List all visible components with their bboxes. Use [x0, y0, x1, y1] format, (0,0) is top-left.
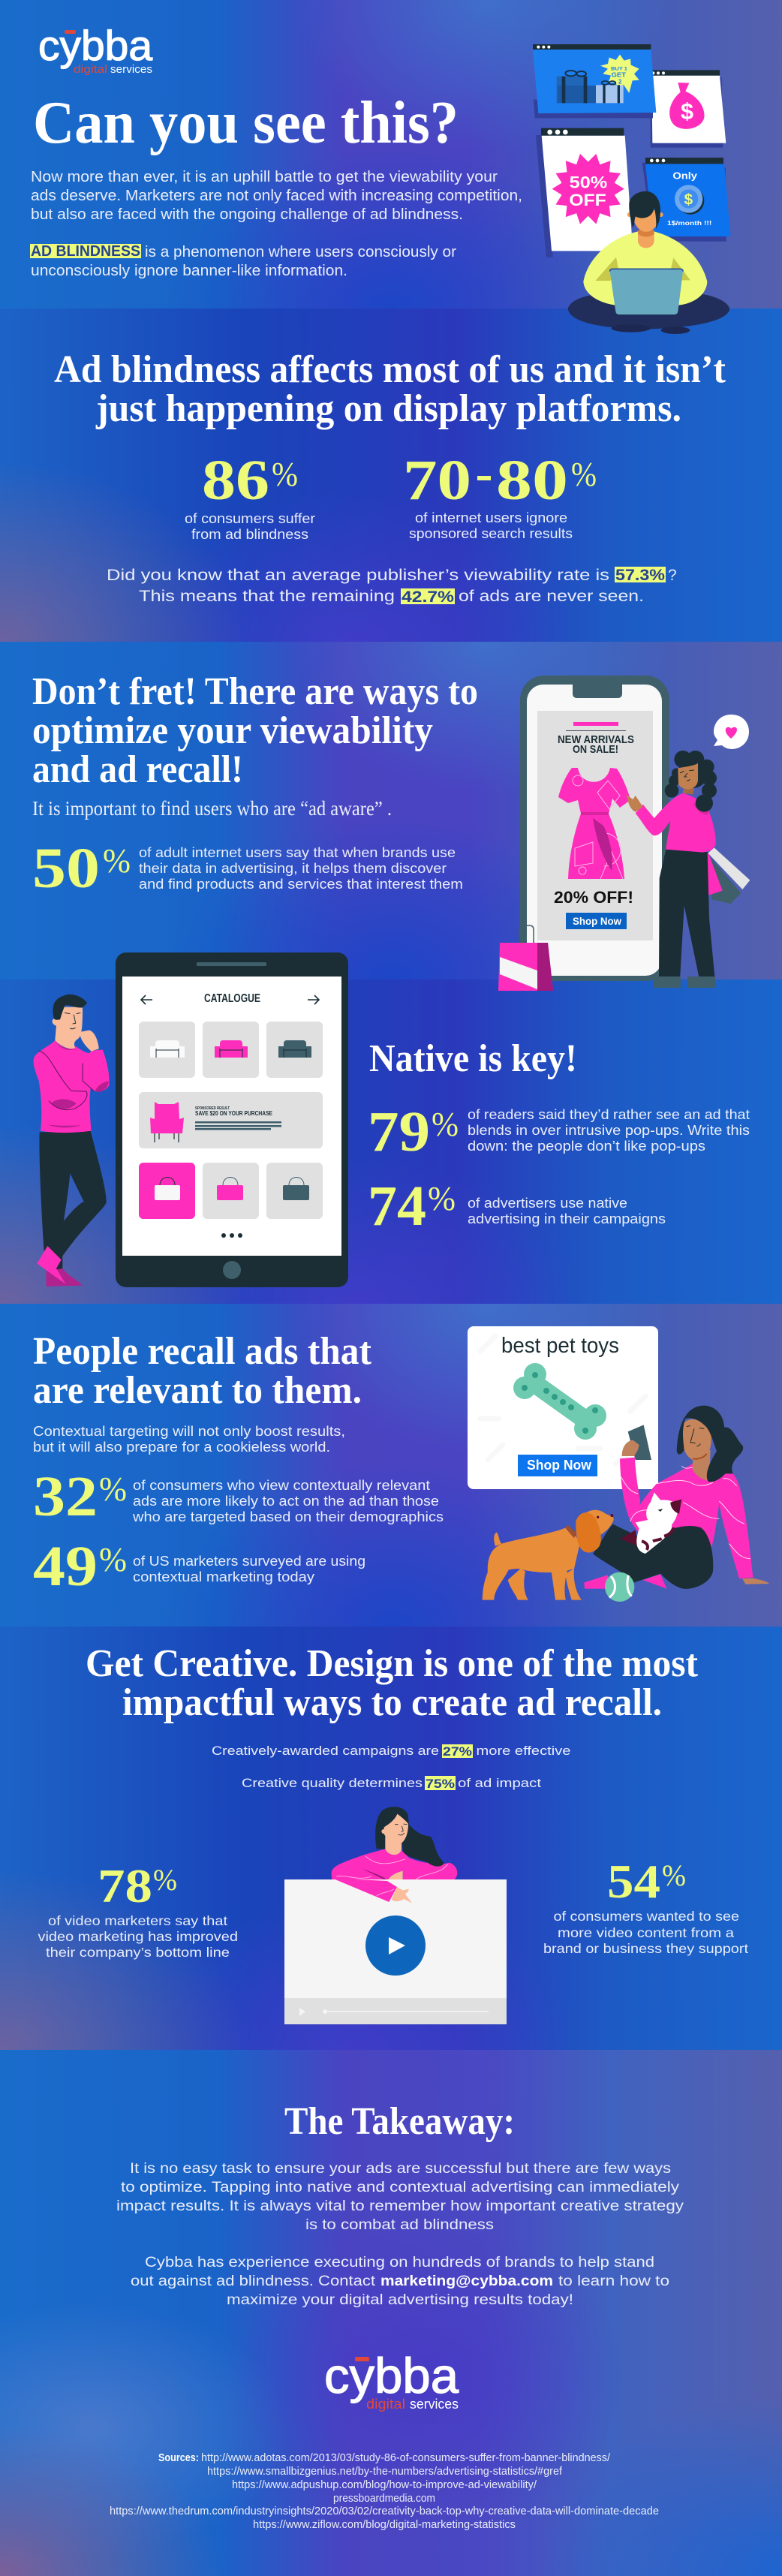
stat: 50% — [32, 837, 463, 900]
woman behind player — [332, 1807, 457, 1882]
ad blindness definition: unconsciously ignore banner-like information. — [31, 263, 347, 279]
catalogue heading and arrows: CATALOGUE — [204, 992, 260, 1005]
window: 50% off: 50% — [570, 173, 607, 191]
heading: Don’t fret! There are ways to — [32, 670, 478, 713]
stat: 50%: 50 — [32, 837, 100, 900]
heading: People recall ads that — [33, 1330, 372, 1373]
subheading: It is important to find users who are “ad aware” . — [32, 797, 392, 820]
panel: get creative — [38, 1642, 748, 2024]
stat: 78%: % — [153, 1863, 177, 1897]
sponsored result banner — [139, 1092, 323, 1148]
background: optimize panel — [0, 642, 782, 980]
stat: 70-80%: sponsored search results — [409, 526, 573, 541]
sources: https://www.ziflow.com/blog/digital-marketing-statistics — [253, 2518, 516, 2531]
stat: 78%: their company’s bottom line — [46, 1945, 230, 1960]
logo: cybba digital services: digital — [74, 63, 107, 76]
intro paragraph: but also are faced with the ongoing challenge of ad blindness. — [31, 206, 463, 223]
stat: 78%: 78 — [98, 1859, 152, 1912]
stat: 74%: advertising in their campaigns — [468, 1211, 666, 1226]
heading: The Takeaway: — [284, 2100, 515, 2143]
stat: 32%: who are targeted based on their demographics — [132, 1509, 444, 1524]
window: 1$/month: $ — [684, 191, 693, 209]
stat: 79%: down: the people don’t like pop-ups — [468, 1139, 705, 1154]
background: hero panel — [0, 0, 782, 308]
person with laptop — [568, 191, 729, 334]
stat: 74%: % — [428, 1179, 456, 1217]
window: 1$/month: 1$/month !!! — [667, 219, 711, 227]
sources: Sources: — [158, 2451, 199, 2464]
contextual targeting text: Contextual targeting will not only boost results, — [33, 1424, 345, 1439]
illustration: woman with shopping bags — [626, 751, 750, 988]
illustration: phone with dress ad — [520, 676, 669, 981]
heading: Ad blindness affects most of us and it isn’t — [54, 348, 726, 391]
stat: 49%: % — [99, 1540, 127, 1578]
woman — [584, 1406, 769, 1589]
window: 1$/month: Only — [672, 170, 697, 181]
contact paragraph: Cybba has experience executing on hundreds of brands to help stand — [145, 2255, 654, 2271]
window: buy 1 get 2: BUY 1 — [611, 66, 627, 71]
contact paragraph: out against ad blindness. Contact — [131, 2274, 376, 2289]
stat: 32%: of consumers who view contextually relevant — [133, 1478, 430, 1493]
stat: 32%: ads are more likely to act on the ad than those — [133, 1494, 439, 1509]
logo: cybba digital services: services — [410, 2397, 459, 2412]
stat: 49% — [33, 1535, 365, 1598]
woman's arm over player — [332, 1879, 412, 1903]
shop now button — [566, 913, 627, 929]
stat: 70-80%: % — [571, 455, 597, 493]
heading: and ad recall! — [32, 748, 243, 791]
viewability callout — [107, 567, 677, 606]
stat: 49%: contextual marketing today — [133, 1569, 314, 1584]
panel: native is key — [34, 952, 750, 1287]
panel: relevant ads — [33, 1326, 769, 1602]
panel: takeaway — [110, 2100, 684, 2531]
stat: 79%: % — [432, 1105, 459, 1143]
window: 50% off: OFF — [569, 191, 606, 209]
heading: impactful ways to create ad recall. — [122, 1681, 662, 1724]
catalogue heading and arrows — [141, 992, 319, 1005]
stat: 78% — [38, 1859, 238, 1960]
viewability callout: 57.3% — [615, 567, 665, 584]
creative stat: 27%: more effective — [476, 1744, 570, 1758]
sources — [110, 2451, 659, 2531]
stat: 70-80% — [403, 449, 597, 541]
background: native panel — [0, 980, 782, 1304]
icon: heart speech bubble — [714, 715, 749, 749]
illustration: thinking man — [34, 995, 110, 1286]
illustration: woman with dog and cat — [483, 1406, 769, 1602]
product tiles — [139, 1022, 323, 1078]
illustration: tablet catalogue — [116, 952, 348, 1287]
stat: 79%: 79 — [368, 1100, 430, 1163]
pagination dots — [221, 1233, 242, 1238]
sources: https://www.thedrum.com/industryinsights/2020/03/02/creativity-back-top-why-creative-data-will-dominate-decade — [110, 2505, 659, 2517]
takeaway paragraph: to optimize. Tapping into native and contextual advertising can immediately — [121, 2180, 680, 2195]
takeaway paragraph — [116, 2161, 684, 2233]
stat: 79%: of readers said they’d rather see an ad that — [468, 1107, 750, 1122]
takeaway paragraph: impact results. It is always vital to remember how important creative strategy — [116, 2198, 684, 2214]
icon: tennis ball — [605, 1572, 634, 1602]
contact paragraph: to learn how to — [558, 2274, 669, 2289]
icon: play button — [365, 1915, 426, 1976]
panel: optimize viewability — [32, 670, 750, 991]
stat: 74% — [368, 1175, 666, 1238]
contextual targeting text: but it will also prepare for a cookieless world. — [33, 1440, 330, 1455]
stat: 70-80%: of internet users ignore — [415, 510, 567, 525]
window: money bag — [651, 70, 726, 148]
stat: 50%: % — [103, 841, 131, 880]
cat — [621, 1492, 681, 1554]
panel: ad blindness stats — [54, 348, 726, 606]
heading — [54, 348, 726, 430]
stat: 54%: more video content from a — [558, 1925, 734, 1940]
viewability callout: This means that the remaining — [139, 588, 395, 605]
stat: 79%: blends in over intrusive pop-ups. Write this — [468, 1123, 750, 1138]
stat: 54% — [543, 1855, 748, 1956]
background: relevance panel — [0, 1304, 782, 1627]
illustration: woman leaning on video player — [284, 1807, 507, 2024]
ad blindness definition — [30, 243, 456, 279]
contact paragraph: marketing@cybba.com — [380, 2274, 553, 2289]
logo: cybba digital services: cybba — [324, 2348, 459, 2403]
creative stat: 75%: of ad impact — [458, 1776, 541, 1790]
ad headline — [558, 733, 634, 756]
contextual targeting text — [33, 1424, 345, 1455]
creative stat: 75%: Creative quality determines — [242, 1776, 423, 1790]
creative stat: 75% — [242, 1776, 541, 1791]
background: ad blindness stats panel — [0, 308, 782, 642]
heading: Native is key! — [369, 1037, 577, 1080]
icon: bone — [513, 1363, 606, 1440]
stat: 78%: video marketing has improved — [38, 1929, 238, 1944]
window: buy 1 get 2: 2 — [618, 79, 622, 86]
takeaway paragraph: It is no easy task to ensure your ads are successful but there are few ways — [130, 2161, 671, 2177]
window: money bag: $ — [681, 98, 693, 124]
stat: 86%: 86 — [202, 449, 269, 512]
heading: are relevant to them. — [33, 1369, 362, 1412]
stat: 50%: of adult internet users say that when brands use — [139, 845, 456, 860]
stat: 54%: 54 — [607, 1855, 660, 1908]
heading: Get Creative. Design is one of the most — [86, 1642, 699, 1685]
sources: https://www.smallbizgenius.net/by-the-numbers/advertising-statistics/#gref — [207, 2465, 563, 2478]
intro paragraph: ads deserve. Marketers are not only faced with increasing competition, — [31, 188, 522, 204]
stat: 86%: % — [272, 455, 298, 493]
stat: 32%: % — [99, 1470, 127, 1508]
heading: just happening on display platforms. — [95, 387, 681, 430]
stat: 49%: 49 — [33, 1535, 98, 1598]
window: 1$/month — [642, 158, 730, 242]
stat: 54%: % — [662, 1858, 686, 1892]
ad headline: ON SALE! — [573, 743, 618, 756]
stat: 74%: of advertisers use native — [468, 1196, 627, 1211]
stat: 86%: of consumers suffer — [185, 511, 315, 526]
stat: 70-80%: 80 — [496, 449, 568, 512]
ad blindness definition: AD BLINDNESS — [31, 243, 140, 260]
stat: 79% — [368, 1100, 750, 1163]
creative stat: 27%: Creatively-awarded campaigns are — [212, 1744, 439, 1758]
creative stat: 27% — [212, 1744, 570, 1759]
sponsored result banner: SPONSORED RESULT — [195, 1106, 230, 1111]
stat: 86% — [185, 449, 315, 542]
shop now button — [518, 1455, 597, 1476]
logo: cybba digital services: services — [110, 63, 152, 76]
heading — [33, 1330, 372, 1412]
heading — [32, 670, 478, 791]
stat: 70-80%: 70 — [403, 449, 471, 512]
creative stat: 27%: 27% — [443, 1744, 472, 1759]
ad card: best pet toys — [468, 1326, 658, 1489]
stat: 86%: from ad blindness — [191, 527, 308, 542]
takeaway paragraph: is to combat ad blindness — [305, 2217, 494, 2233]
intro paragraph: Now more than ever, it is an uphill battle to get the viewability your — [31, 169, 498, 185]
dog — [483, 1510, 614, 1600]
title: Can you see this? — [33, 90, 459, 156]
ad headline: best pet toys — [501, 1334, 619, 1358]
stat: 50%: their data in advertising, it helps them discover — [139, 861, 447, 876]
window: buy 1 get 2: GET — [612, 71, 627, 79]
sources: https://www.adpushup.com/blog/how-to-improve-ad-viewability/ — [232, 2478, 537, 2491]
background: takeaway panel — [0, 2050, 782, 2576]
creative stat: 75%: 75% — [426, 1777, 455, 1791]
stat: 32%: 32 — [33, 1465, 98, 1528]
stat: 54%: of consumers wanted to see — [554, 1909, 739, 1924]
viewability callout: Did you know that an average publisher’s viewability rate is — [107, 567, 609, 584]
shop now button: Shop Now — [573, 915, 621, 927]
logo: cybba digital services: digital — [366, 2397, 405, 2412]
heading — [86, 1642, 699, 1724]
sponsored result banner: SAVE $20 ON YOUR PURCHASE — [195, 1110, 273, 1117]
contact paragraph — [131, 2255, 669, 2308]
stat: 54%: brand or business they support — [543, 1941, 748, 1956]
shop now button: Shop Now — [527, 1458, 592, 1473]
ad headline: NEW ARRIVALS — [558, 733, 634, 746]
stat: 78%: of video marketers say that — [48, 1913, 227, 1928]
sources: pressboardmedia.com — [333, 2492, 435, 2505]
sources: http://www.adotas.com/2013/03/study-86-of-consumers-suffer-from-banner-blindness/ — [201, 2451, 611, 2464]
stat: 50%: and find products and services that interest them — [139, 877, 463, 892]
viewability callout: of ads are never seen. — [459, 588, 644, 605]
heading: optimize your viewability — [32, 709, 433, 752]
bag tiles — [139, 1163, 323, 1219]
contact paragraph: maximize your digital advertising results today! — [227, 2292, 573, 2308]
video player — [284, 1879, 507, 2024]
illustration: ad windows and person with laptop — [533, 44, 730, 334]
logo: cybba digital services: cybba — [38, 22, 153, 69]
panel: hero — [30, 22, 730, 334]
dress — [558, 768, 630, 879]
ad blindness definition: is a phenomenon where users consciously or — [145, 244, 456, 260]
icon: pink shopping bag — [498, 925, 553, 991]
stat: 74%: 74 — [368, 1175, 426, 1238]
viewability callout: 42.7% — [402, 588, 454, 606]
window: buy 1 get 2 — [533, 44, 656, 118]
stat: 32% — [33, 1465, 444, 1528]
discount label: 20% OFF! — [554, 888, 633, 907]
intro paragraph — [31, 169, 522, 223]
background: creative panel — [0, 1627, 782, 2050]
stat: 49%: of US marketers surveyed are using — [133, 1554, 365, 1569]
window: 50% off — [536, 128, 633, 257]
viewability callout: ? — [668, 567, 677, 584]
